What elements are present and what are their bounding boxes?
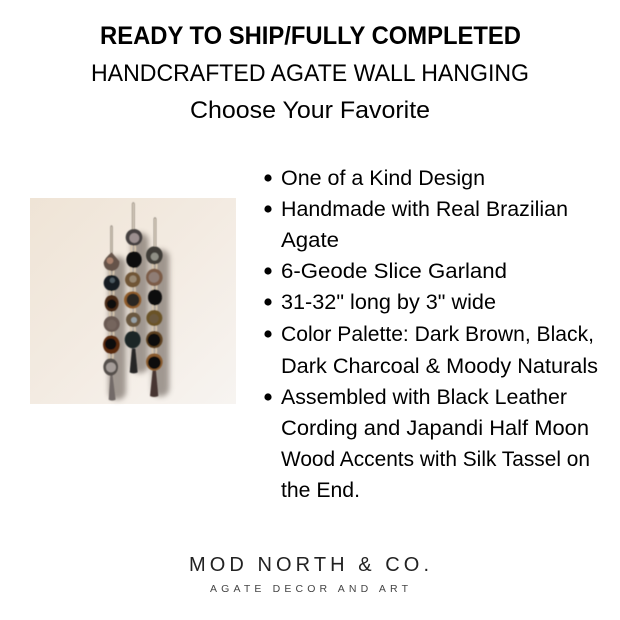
bullet: color palette: Color Palette: Dark Brown, Black, bbox=[281, 323, 594, 346]
feature list bbox=[264, 167, 598, 502]
bullet: handmade bbox=[264, 198, 568, 252]
bullet: assembly bbox=[264, 386, 590, 502]
hanging strand: right bbox=[146, 218, 163, 397]
subheading: choose your favorite: Choose Your Favorite bbox=[190, 97, 430, 124]
bullet: one of a kind: One of a Kind Design bbox=[281, 167, 485, 190]
bullet: assembly: the End. bbox=[281, 479, 360, 502]
bullet: size: 31-32" long by 3" wide bbox=[281, 291, 496, 314]
bullet: garland: 6-Geode Slice Garland bbox=[281, 260, 507, 283]
subheading: product name: HANDCRAFTED AGATE WALL HANGING bbox=[91, 60, 529, 87]
title bbox=[91, 22, 529, 124]
brand logo bbox=[189, 554, 429, 595]
bullet: color palette: Dark Charcoal & Moody Naturals bbox=[281, 355, 598, 378]
shadows bbox=[109, 233, 169, 400]
bullet: color palette bbox=[264, 323, 598, 378]
bullet: assembly: Cording and Japandi Half Moon bbox=[281, 417, 589, 440]
brand tagline: AGATE DECOR AND ART bbox=[210, 583, 409, 595]
hanging strand: left bbox=[103, 226, 120, 401]
hanging strand: middle bbox=[124, 202, 142, 373]
brand name: MOD NORTH & CO. bbox=[189, 554, 429, 576]
heading: ready to ship: READY TO SHIP/FULLY COMPLETED bbox=[100, 22, 521, 50]
bullet: assembly: Wood Accents with Silk Tassel on bbox=[281, 448, 590, 471]
photo: agate wall hangings bbox=[30, 198, 236, 404]
bullet: handmade: Handmade with Real Brazilian bbox=[281, 198, 568, 221]
bullet: handmade: Agate bbox=[281, 229, 339, 252]
bullet: assembly: Assembled with Black Leather bbox=[281, 386, 567, 409]
